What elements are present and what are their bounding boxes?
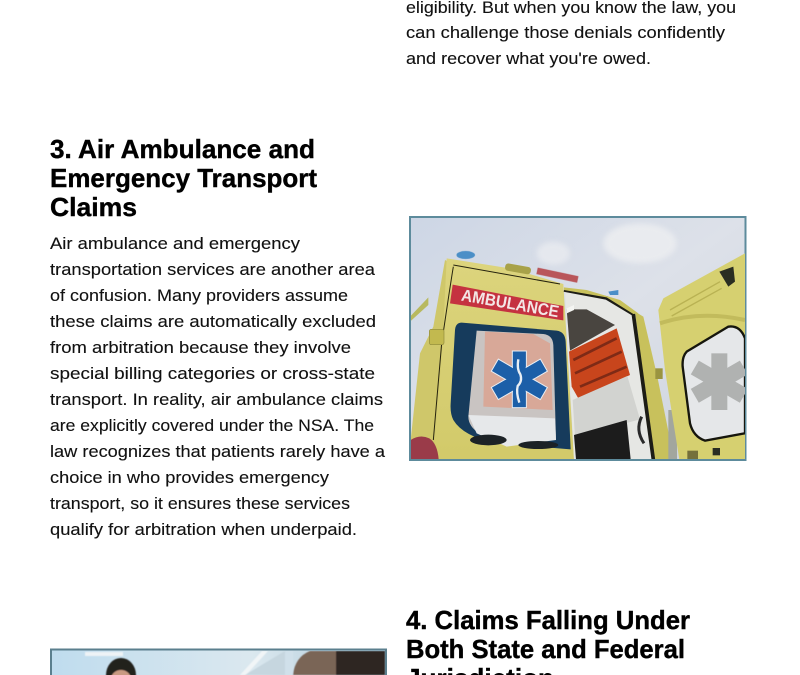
text block: section 3 body: are explicitly covered under the NSA. The xyxy=(50,416,374,435)
text block: section 3 body: of confusion. Many providers assume xyxy=(50,286,348,305)
text block: end of previous section: can challenge those denials confidently xyxy=(406,23,726,42)
text block: section 3 body: law recognizes that patients rarely have a xyxy=(50,442,386,461)
text block: end of previous section xyxy=(406,0,736,68)
image: doctor with patient, cropped xyxy=(51,650,386,675)
faded star of life xyxy=(691,353,748,410)
text block: section 3 body: Air ambulance and emergency xyxy=(50,234,301,253)
open right door xyxy=(658,253,745,459)
side of van xyxy=(411,260,457,459)
text block: section 3 body: choice in who provides emergency xyxy=(50,468,330,487)
van interior xyxy=(565,290,653,459)
heading: section 4: 4. Claims Falling Under xyxy=(406,605,690,635)
text block: section 3 body: special billing categories or cross-state xyxy=(50,364,375,383)
image: open ambulance rear doors: AMBULANCE xyxy=(460,286,560,321)
star of life xyxy=(491,351,547,408)
text block: section 3 body: these claims are automatically excluded xyxy=(50,312,376,331)
image: open ambulance rear doors xyxy=(410,217,748,460)
tail light xyxy=(411,437,439,459)
heading: section 3: Claims xyxy=(50,192,137,222)
heading: section 4: Both State and Federal xyxy=(406,634,685,664)
door window xyxy=(451,323,571,449)
yellow door frame xyxy=(635,313,668,459)
text block: section 3 body: transport, so it ensures these services xyxy=(50,494,350,513)
text block: section 3 body: from arbitration because they involve xyxy=(50,338,351,357)
text block: section 3 body xyxy=(50,234,386,539)
text block: section 3 body: transportation services are another area xyxy=(50,260,376,279)
text block: section 3 body: transport. In reality, air ambulance claims xyxy=(50,390,383,409)
heading: section 4 xyxy=(406,605,690,675)
ambulance stripe xyxy=(450,285,563,320)
left door xyxy=(433,258,574,459)
text block: end of previous section: and recover what you're owed. xyxy=(406,49,651,68)
heading: section 3: Emergency Transport xyxy=(50,163,317,193)
heading: section 3: 3. Air Ambulance and xyxy=(50,134,315,164)
heading: section 3 xyxy=(50,134,317,222)
text block: section 3 body: qualify for arbitration when underpaid. xyxy=(50,520,357,539)
